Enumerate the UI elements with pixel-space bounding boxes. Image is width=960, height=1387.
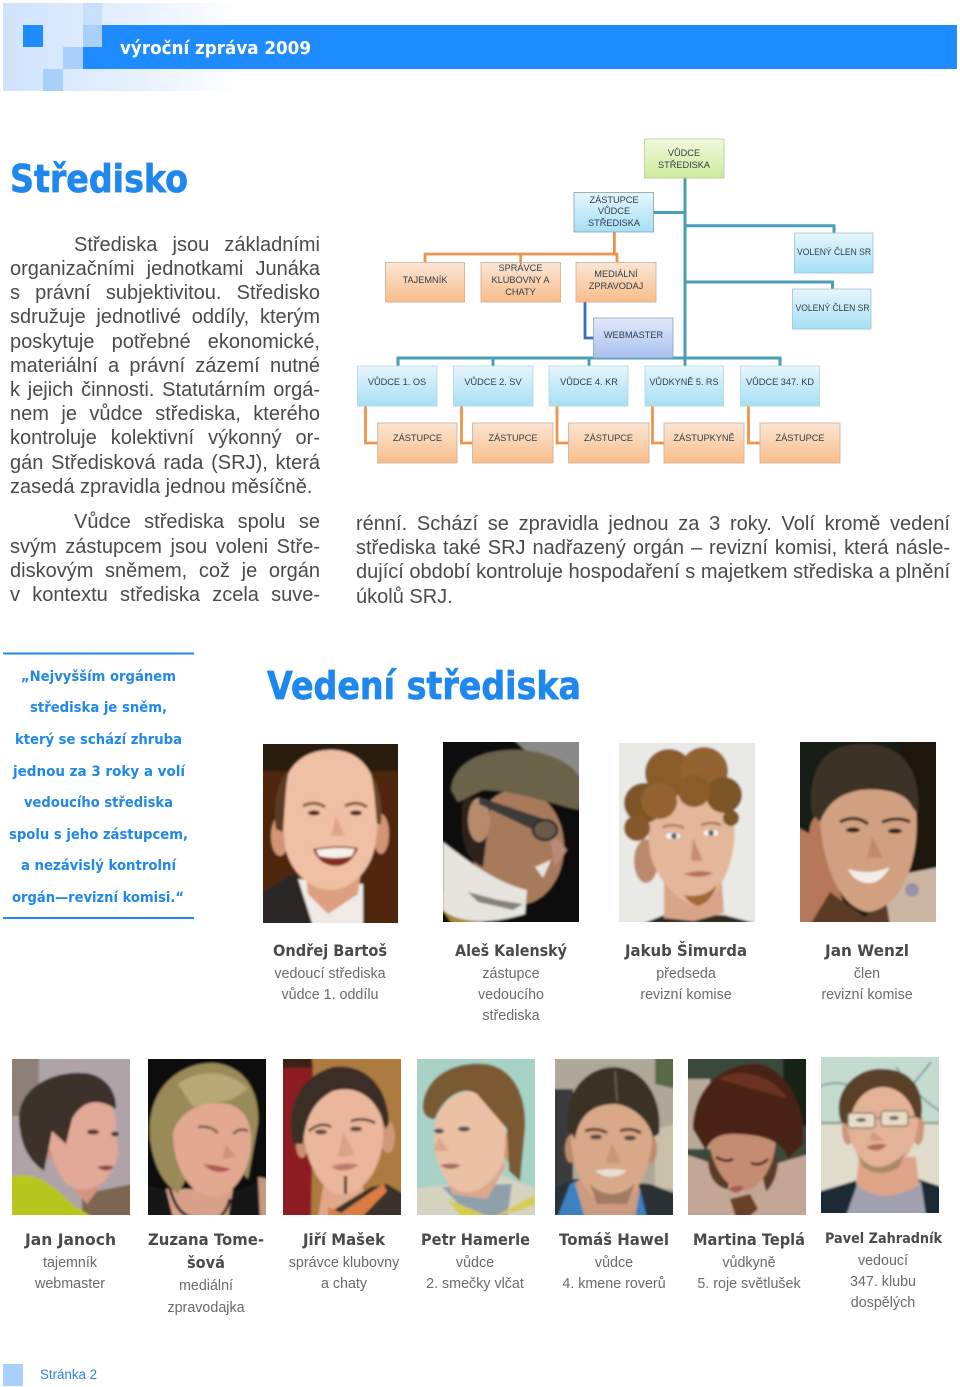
- text block: first paragraph: nem je vůdce střediska, kterého: [10, 403, 320, 425]
- caption: Jakub Šimurda: Jakub Šimurda: [624, 941, 747, 960]
- caption: Martina Teplá: 5. roje světlušek: [697, 1276, 801, 1292]
- caption: Jan Janoch: [24, 1230, 116, 1292]
- photo: Zuzana Tomešová: [148, 1059, 266, 1215]
- text block: first paragraph: gán Středisková rada (SRJ), která: [10, 452, 320, 474]
- text block: first paragraph: materiální a právní zázemí nutné: [10, 355, 320, 377]
- photo: Ondřej Bartoš: [263, 744, 398, 923]
- caption: Zuzana Tomešová: [148, 1230, 264, 1316]
- caption: Jan Janoch: webmaster: [34, 1276, 105, 1292]
- box: zástupkyně: [664, 423, 744, 463]
- photo: Jan Janoch: [12, 1059, 130, 1215]
- text block: second paragraph continued: [356, 513, 950, 608]
- caption: Tomáš Hawel: [559, 1230, 669, 1292]
- text block: first paragraph: organizačními jednotkami Junáka: [10, 258, 320, 280]
- callout quote: vedoucího střediska: [24, 795, 173, 811]
- box: zástupkyně: ZÁSTUPKYNĚ: [673, 433, 735, 443]
- text block: second paragraph continued: střediska také SRJ nadřazený orgán – revizní komisi, která násle-: [356, 537, 950, 559]
- banner title: výroční zpráva 2009: [120, 38, 311, 59]
- text block: second paragraph: diskovým sněmem, což je orgán: [10, 560, 320, 582]
- header banner: [3, 3, 957, 91]
- caption: Jakub Šimurda: [624, 941, 747, 1003]
- callout quote: [3, 652, 194, 919]
- caption: Jiří Mašek: a chaty: [321, 1276, 368, 1292]
- text block: second paragraph continued: úkolů SRJ.: [356, 586, 453, 608]
- caption: Jan Wenzl: [821, 941, 913, 1003]
- caption: Ondřej Bartoš: [273, 941, 387, 1003]
- heading: Středisko: Středisko: [10, 157, 188, 201]
- text block: second paragraph: [10, 511, 320, 606]
- text block: second paragraph: svým zástupcem jsou voleni Stře-: [10, 536, 320, 558]
- box: vůdce 2. SV: [454, 366, 533, 406]
- caption: Aleš Kalenský: Aleš Kalenský: [455, 941, 568, 960]
- box: volený člen SR 2: VOLENÝ ČLEN SR: [796, 303, 870, 313]
- box: mediální zpravodaj: MEDIÁLNÍ: [594, 269, 638, 279]
- text block: second paragraph: v kontextu střediska zcela suve-: [10, 584, 320, 606]
- box: volený člen SR 1: VOLENÝ ČLEN SR: [797, 247, 871, 257]
- caption: Ondřej Bartoš: Ondřej Bartoš: [273, 941, 387, 960]
- text block: first paragraph: kontroluje kolektivní výkonný or-: [10, 427, 320, 449]
- photo: Martina Teplá: [688, 1059, 806, 1215]
- footer page marker: Stránka 2: [40, 1367, 97, 1382]
- box: zástupce 3: [568, 423, 649, 463]
- caption: Pavel Zahradník: 347. klubu: [850, 1274, 916, 1290]
- box: správce klubovny a chaty: SPRÁVCE: [499, 263, 542, 273]
- caption: Zuzana Tomešová: Zuzana Tome-: [148, 1230, 264, 1249]
- caption: Jiří Mašek: Jiří Mašek: [302, 1230, 385, 1249]
- box: vůdce 347. KD: [740, 366, 820, 406]
- caption: Jan Wenzl: Jan Wenzl: [824, 941, 909, 960]
- photo: Aleš Kalenský: [443, 742, 579, 922]
- organisation chart: [358, 139, 873, 463]
- caption: Jan Wenzl: člen: [854, 966, 880, 982]
- callout quote: který se schází zhruba: [15, 732, 182, 748]
- box: vůdce střediska: [644, 139, 724, 178]
- text block: first paragraph: sdružuje jednotlivé oddíly, kterým: [10, 306, 320, 328]
- box: webmaster: WEBMASTER: [604, 330, 663, 340]
- text block: first paragraph: poskytuje potřebné ekonomické,: [10, 331, 320, 353]
- caption: Martina Teplá: [693, 1230, 805, 1292]
- caption: Aleš Kalenský: vedoucího: [478, 987, 544, 1003]
- caption: Petr Hamerle: 2. smečky vlčat: [426, 1276, 524, 1292]
- box: vůdce 2. SV: VŮDCE 2. SV: [464, 376, 522, 387]
- caption: Petr Hamerle: vůdce: [456, 1255, 494, 1271]
- caption: Zuzana Tomešová: mediální: [179, 1278, 233, 1294]
- box: mediální zpravodaj: [576, 262, 656, 302]
- box: vůdkyně 5. RS: VŮDKYNĚ 5. RS: [650, 376, 718, 387]
- box: vůdce 4. KR: [549, 366, 628, 406]
- caption: Pavel Zahradník: vedoucí: [858, 1253, 908, 1269]
- heading: Vedení střediska: Vedení střediska: [267, 664, 581, 708]
- text block: second paragraph: Vůdce střediska spolu se: [74, 511, 320, 533]
- callout quote: „Nejvyšším orgánem: [21, 669, 176, 685]
- caption: Jan Janoch: tajemník: [43, 1255, 98, 1271]
- caption: Jiří Mašek: [289, 1230, 400, 1292]
- text block: first paragraph: [10, 234, 320, 498]
- callout quote: střediska je sněm,: [30, 700, 167, 716]
- box: zástupce 1: [378, 423, 457, 463]
- caption: Jan Wenzl: revizní komise: [821, 987, 913, 1003]
- box: mediální zpravodaj: ZPRAVODAJ: [589, 281, 643, 291]
- box: vůdkyně 5. RS: [645, 366, 724, 406]
- footer page marker: [3, 1364, 97, 1386]
- caption: Zuzana Tomešová: zpravodajka: [167, 1300, 245, 1316]
- text block: first paragraph: k jejich činnosti. Statutárním orgá-: [10, 379, 320, 401]
- box: zástupce 5: [760, 423, 840, 463]
- box: správce klubovny a chaty: CHATY: [505, 287, 536, 297]
- box: tajemník: TAJEMNÍK: [403, 275, 448, 285]
- callout quote: orgán—revizní komisi.“: [12, 890, 184, 906]
- photo: Tomáš Hawel: [555, 1059, 673, 1215]
- text block: first paragraph: Střediska jsou základními: [74, 234, 320, 256]
- caption: Jakub Šimurda: revizní komise: [640, 987, 732, 1003]
- callout quote: spolu s jeho zástupcem,: [9, 827, 188, 843]
- caption: Pavel Zahradník: dospělých: [851, 1295, 915, 1311]
- caption: Aleš Kalenský: [455, 941, 568, 1024]
- box: webmaster: [594, 318, 673, 358]
- caption: Petr Hamerle: [421, 1230, 530, 1292]
- box: zástupce 5: ZÁSTUPCE: [775, 433, 825, 443]
- callout quote: jednou za 3 roky a volí: [12, 764, 186, 780]
- caption: Martina Teplá: Martina Teplá: [693, 1230, 805, 1249]
- caption: Martina Teplá: vůdkyně: [722, 1255, 776, 1271]
- box: vůdce 1. OS: VŮDCE 1. OS: [368, 376, 426, 387]
- caption: Aleš Kalenský: střediska: [482, 1008, 540, 1024]
- photo: Jan Wenzl: [800, 742, 936, 922]
- caption: Tomáš Hawel: 4. kmene roverů: [562, 1276, 666, 1292]
- box: tajemník: [386, 262, 464, 302]
- callout quote: a nezávislý kontrolní: [21, 858, 177, 874]
- caption: Tomáš Hawel: Tomáš Hawel: [559, 1230, 669, 1249]
- caption: Ondřej Bartoš: vedoucí střediska: [274, 966, 386, 982]
- text block: first paragraph: zasedá zpravidla jednou měsíčně.: [10, 476, 312, 498]
- box: volený člen SR 2: [792, 289, 871, 329]
- caption: Jan Janoch: Jan Janoch: [24, 1230, 116, 1249]
- box: vůdce střediska: VŮDCE: [668, 147, 700, 158]
- box: vůdce 347. KD: VŮDCE 347. KD: [746, 376, 814, 387]
- photo: Pavel Zahradník: [821, 1057, 939, 1213]
- caption: Aleš Kalenský: zástupce: [482, 966, 540, 982]
- caption: Tomáš Hawel: vůdce: [595, 1255, 633, 1271]
- photo: Petr Hamerle: [417, 1059, 535, 1215]
- box: správce klubovny a chaty: KLUBOVNY A: [491, 275, 550, 285]
- box: vůdce střediska: STŘEDISKA: [658, 160, 711, 170]
- box: zástupce vůdce střediska: STŘEDISKA: [588, 218, 641, 228]
- caption: Zuzana Tomešová: šová: [187, 1253, 225, 1272]
- box: vůdce 4. KR: VŮDCE 4. KR: [560, 376, 618, 387]
- box: zástupce vůdce střediska: [574, 192, 654, 232]
- caption: Pavel Zahradník: Pavel Zahradník: [825, 1231, 942, 1247]
- box: zástupce vůdce střediska: VŮDCE: [598, 205, 630, 216]
- text block: second paragraph continued: rénní. Schází se zpravidla jednou za 3 roky. Volí kromě vedení: [356, 513, 950, 535]
- box: zástupce 3: ZÁSTUPCE: [584, 433, 633, 443]
- box: zástupce 1: ZÁSTUPCE: [393, 433, 442, 443]
- caption: Jiří Mašek: správce klubovny: [289, 1255, 400, 1271]
- box: vůdce 1. OS: [358, 366, 437, 406]
- caption: Jakub Šimurda: předseda: [656, 966, 716, 982]
- caption: Petr Hamerle: Petr Hamerle: [421, 1230, 530, 1249]
- box: zástupce 2: ZÁSTUPCE: [488, 433, 538, 443]
- box: správce klubovny a chaty: [481, 262, 560, 302]
- box: zástupce 2: [472, 423, 553, 463]
- photo: Jiří Mašek: [283, 1059, 401, 1215]
- box: zástupce vůdce střediska: ZÁSTUPCE: [589, 195, 639, 205]
- text block: first paragraph: s právní subjektivitou. Středisko: [10, 282, 320, 304]
- caption: Pavel Zahradník: [825, 1231, 942, 1311]
- caption: Ondřej Bartoš: vůdce 1. oddílu: [282, 987, 378, 1003]
- text block: second paragraph continued: dující období kontroluje hospodaření s majetkem střediska a plnění: [356, 561, 950, 583]
- photo: Jakub Šimurda: [619, 743, 755, 922]
- box: volený člen SR 1: [794, 233, 873, 273]
